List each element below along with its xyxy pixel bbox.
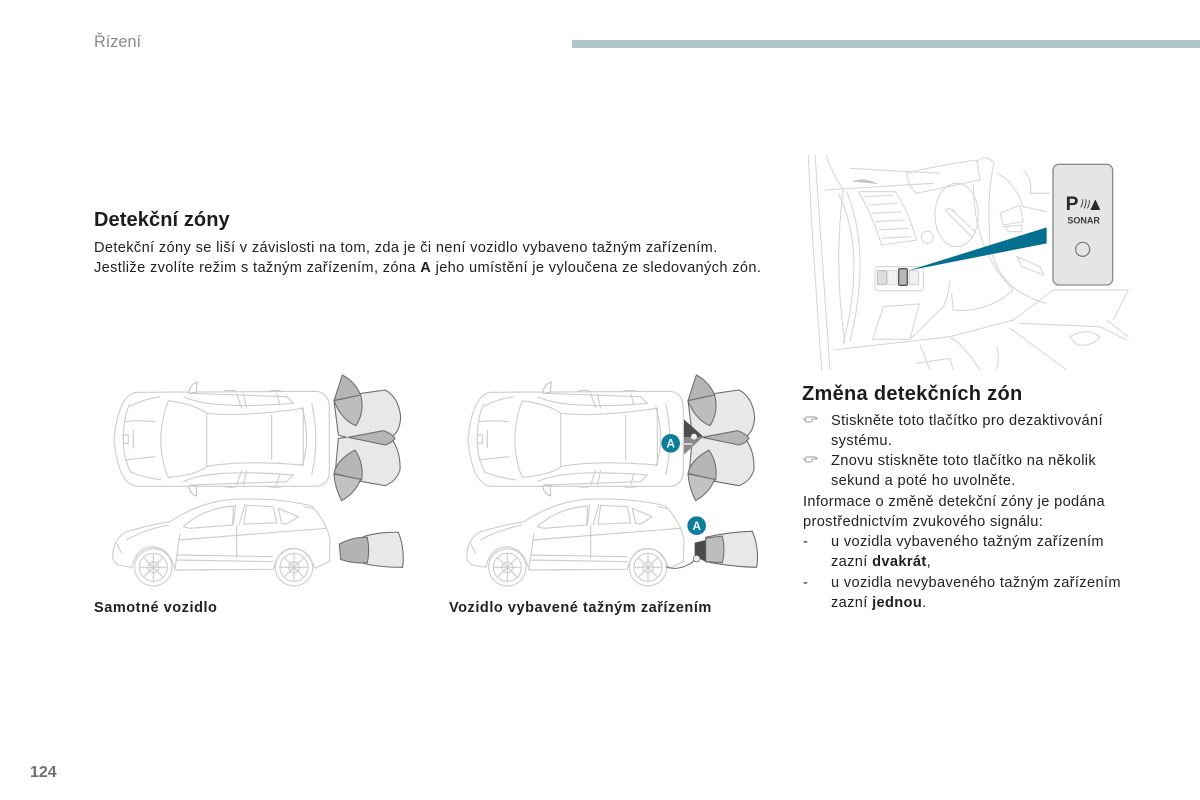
- illustration: dashboard with sonar button: [808, 155, 1128, 370]
- text block: instructions: u vozidla vybaveného tažným zařízením: [831, 534, 1104, 550]
- towing exclusion zone side view: [666, 540, 706, 568]
- text block: detection zones description: Jestliže zvolíte režim s tažným zařízením, zóna A jeho umístění je vyloučena ze sledovaných zón.: [94, 260, 761, 276]
- diagram: vehicle alone: [113, 375, 403, 586]
- car top view: [468, 382, 683, 496]
- diagram: vehicle with towing device: [467, 375, 758, 586]
- detection zones top view: [334, 375, 401, 501]
- car side view: [113, 499, 330, 586]
- towing exclusion zone top view: [681, 419, 703, 455]
- text block: instructions: [803, 413, 1121, 611]
- text block: instructions: u vozidla nevybaveného tažným zařízením: [831, 575, 1121, 591]
- text block: detection zones description: [94, 240, 761, 276]
- caption: vehicle alone: Samotné vozidlo: [94, 600, 217, 616]
- text block: instructions: Stiskněte toto tlačítko pro dezaktivování: [831, 413, 1103, 429]
- marker A side: A: [692, 519, 701, 533]
- detection zones top view: [688, 375, 755, 501]
- section label: Řízení: [94, 33, 141, 51]
- caption: vehicle with towing device: Vozidlo vybavené tažným zařízením: [449, 600, 712, 616]
- text block: instructions: -: [803, 534, 808, 550]
- text block: instructions: Znovu stiskněte toto tlačítko na několik: [831, 453, 1096, 469]
- text block: detection zones description: Detekční zóny se liší v závislosti na tom, zda je či není vozidlo vybaveno tažným zařízením.: [94, 240, 718, 256]
- heading: changing detection zones: Změna detekčních zón: [802, 383, 1022, 405]
- text block: instructions: systému.: [831, 433, 892, 449]
- text block: instructions: zazní jednou.: [831, 595, 927, 611]
- text block: instructions: zazní dvakrát,: [831, 554, 931, 570]
- icon: pointing hand 2: [803, 457, 817, 462]
- dashboard line art: [808, 155, 1128, 370]
- text block: instructions: prostřednictvím zvukového signálu:: [803, 514, 1043, 530]
- page number: 124: [30, 764, 57, 781]
- heading: detection zones: Detekční zóny: [94, 209, 230, 231]
- text block: instructions: Informace o změně detekční zóny je podána: [803, 494, 1105, 510]
- button panel: [1053, 164, 1113, 285]
- detection zones side view: [706, 531, 758, 567]
- icon: pointing hand 1: [803, 417, 817, 422]
- marker A top: A: [666, 437, 675, 451]
- button panel: SONAR: [1067, 215, 1100, 225]
- car side view: [467, 499, 684, 586]
- marker A side: [687, 516, 706, 535]
- car top view: [114, 382, 329, 496]
- marker A top: [661, 434, 680, 453]
- button panel: P: [1066, 194, 1079, 215]
- pointer wedge: [908, 227, 1047, 271]
- detection zones side view: [339, 532, 403, 567]
- text block: instructions: -: [803, 575, 808, 591]
- text block: instructions: sekund a poté ho uvolněte.: [831, 473, 1016, 489]
- header bar: [572, 40, 1200, 48]
